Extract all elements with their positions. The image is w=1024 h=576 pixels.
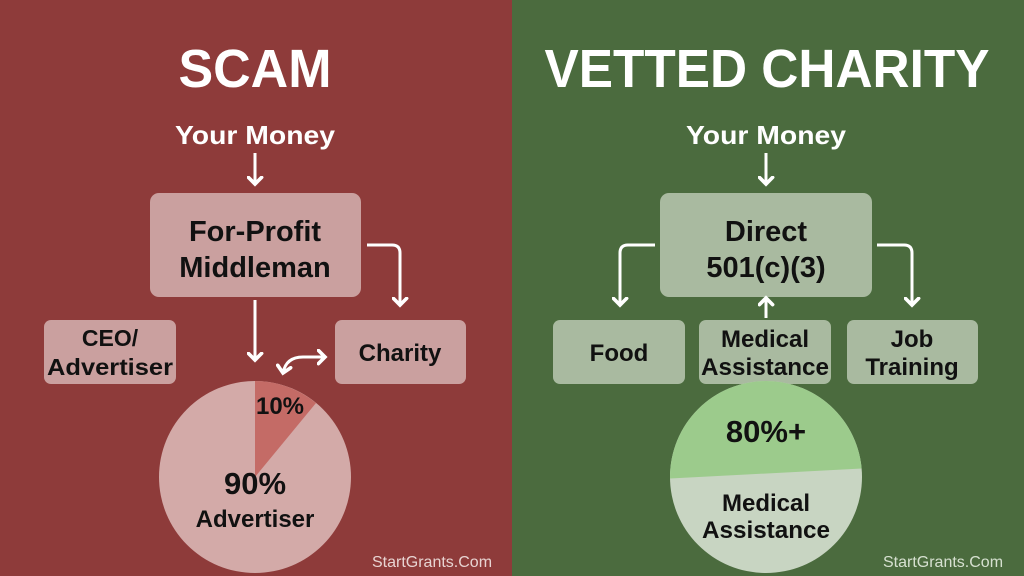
box: job training: Job: [891, 326, 933, 353]
box: job training: [847, 320, 978, 384]
box: job training: Training: [865, 354, 959, 381]
box: food: [553, 320, 685, 384]
box: charity: Charity: [359, 340, 442, 367]
box: ceo advertiser: CEO/: [82, 325, 139, 351]
footer right: StartGrants.Com: [883, 554, 1003, 571]
box: middleman: Middleman: [179, 252, 331, 284]
box: medical assistance: Medical: [721, 326, 809, 353]
pie chart: vetted: Assistance: [702, 517, 830, 544]
pie chart: vetted: Medical: [722, 490, 810, 517]
box: ceo advertiser: [44, 320, 176, 384]
arrow: to job training: [877, 245, 912, 305]
pie chart: vetted: 80%+: [726, 414, 806, 449]
box: middleman: [150, 193, 361, 297]
box: direct 501c3: Direct: [725, 216, 807, 248]
arrow: to food: [620, 245, 655, 305]
arrow: money to direct: [764, 153, 768, 184]
title: scam: SCAM: [178, 39, 332, 99]
arrow: money to middleman: [254, 153, 256, 184]
title: vetted charity: VETTED CHARITY: [544, 39, 990, 99]
box: charity: [335, 320, 466, 384]
pie chart: scam: 10%: [256, 393, 304, 420]
box: ceo advertiser: Advertiser: [47, 354, 173, 380]
panel: vetted charity: [512, 0, 1024, 576]
text: your money right: Your Money: [686, 120, 847, 150]
pie chart: scam: 90%: [224, 466, 286, 501]
arrow: medical up: [764, 298, 768, 318]
box: direct 501c3: 501(c)(3): [706, 252, 826, 284]
box: medical assistance: Assistance: [701, 354, 829, 381]
pie chart: scam: Advertiser: [196, 506, 314, 533]
arrow: middleman to pie: [254, 300, 256, 360]
box: middleman: For-Profit: [189, 216, 321, 248]
box: direct 501c3: [660, 193, 872, 297]
arrow: middleman to charity: [367, 245, 400, 305]
box: food: Food: [590, 340, 648, 367]
box: medical assistance: [699, 320, 831, 384]
pie chart: scam: [159, 381, 351, 573]
pie chart: vetted: [670, 381, 862, 573]
text: your money: Your Money: [175, 120, 336, 150]
panel: scam: [0, 0, 512, 576]
footer left: StartGrants.Com: [372, 554, 492, 571]
arrow: double to charity: [283, 357, 325, 373]
